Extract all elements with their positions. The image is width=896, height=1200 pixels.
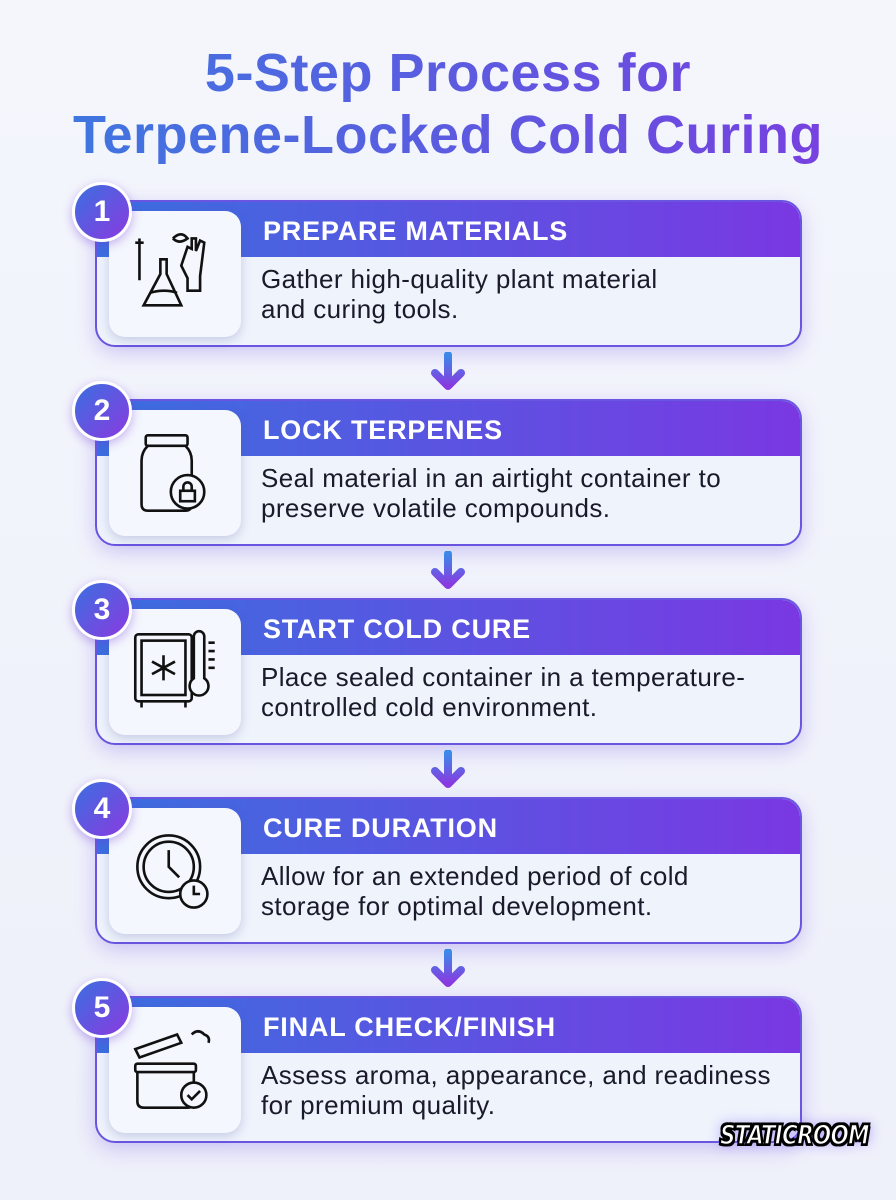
heading: CURE DURATION xyxy=(263,813,498,843)
text: Assess aroma, appearance, and readiness xyxy=(261,1060,771,1090)
icon: jar with lock xyxy=(109,410,241,536)
arrow xyxy=(431,551,465,589)
heading: FINAL CHECK/FINISH xyxy=(263,1012,556,1042)
heading: START COLD CURE xyxy=(263,614,531,644)
panel: step 5 xyxy=(95,996,802,1143)
panel: step 1 xyxy=(95,200,802,347)
panel: step 2 xyxy=(95,399,802,546)
step number xyxy=(72,978,132,1038)
text: storage for optimal development. xyxy=(261,891,652,921)
panel: step 4 xyxy=(95,797,802,944)
text: for premium quality. xyxy=(261,1090,495,1120)
text: and curing tools. xyxy=(261,294,459,324)
title xyxy=(0,42,896,166)
text xyxy=(261,463,721,523)
icon: lab tools xyxy=(109,211,241,337)
text: Gather high-quality plant material xyxy=(261,264,658,294)
step number xyxy=(72,182,132,242)
title: Terpene-Locked Cold Curing xyxy=(73,105,823,165)
text xyxy=(261,1060,771,1120)
title: 5-Step Process for xyxy=(205,43,691,103)
arrow xyxy=(431,949,465,987)
text: Seal material in an airtight container to xyxy=(261,463,721,493)
step number xyxy=(72,381,132,441)
text xyxy=(261,861,689,921)
step number: 1 xyxy=(94,195,110,228)
text: Place sealed container in a temperature- xyxy=(261,662,745,692)
step number: 5 xyxy=(94,991,110,1024)
arrow xyxy=(431,750,465,788)
icon: clock xyxy=(109,808,241,934)
text: Allow for an extended period of cold xyxy=(261,861,689,891)
text: preserve volatile compounds. xyxy=(261,493,610,523)
arrow xyxy=(431,352,465,390)
step number xyxy=(72,580,132,640)
heading: LOCK TERPENES xyxy=(263,415,503,445)
step number: 2 xyxy=(94,394,110,427)
text: controlled cold environment. xyxy=(261,692,597,722)
step number xyxy=(72,779,132,839)
icon: open jar with check xyxy=(109,1007,241,1133)
logo: STATICROOM xyxy=(720,1120,869,1151)
panel: step 3 xyxy=(95,598,802,745)
step number: 3 xyxy=(94,593,110,626)
step number: 4 xyxy=(94,792,110,825)
heading: PREPARE MATERIALS xyxy=(263,216,568,246)
text xyxy=(261,662,745,722)
icon: cold storage xyxy=(109,609,241,735)
text xyxy=(261,264,658,324)
